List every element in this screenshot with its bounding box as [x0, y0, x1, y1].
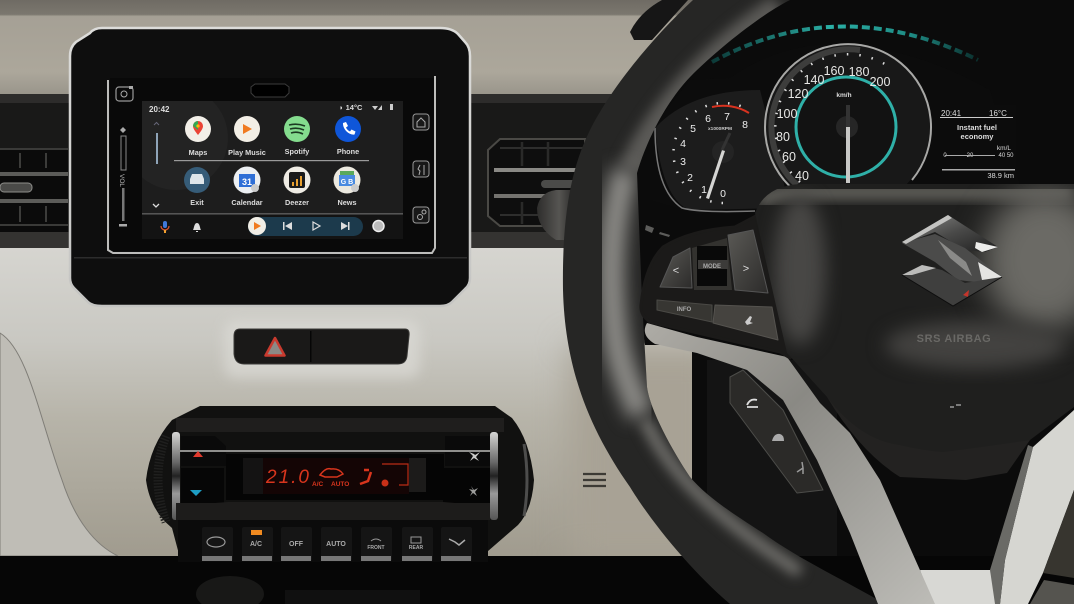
clock: 20:41: [941, 109, 962, 118]
hub top band: [758, 192, 1074, 202]
rim side highlight: [611, 170, 642, 415]
inner shaded band: [771, 49, 860, 185]
rim upper sheen: [632, 8, 780, 170]
scroll arrow up: [154, 122, 159, 125]
volume slider: VOL: [118, 174, 125, 187]
rim lower highlight: [645, 420, 800, 572]
temperature up arrow: [193, 451, 203, 457]
left lower spoke: [645, 323, 935, 604]
rpm labels: 2: [687, 172, 693, 184]
button: recirculate: [202, 527, 233, 561]
app icon: News: [334, 166, 360, 194]
wallpaper swirl: [124, 86, 228, 190]
voice button icon: [772, 434, 784, 441]
status indicators: ◗ 14°C: [339, 103, 363, 112]
temperature reading: 21.0: [265, 467, 311, 488]
Suzuki logo: [902, 215, 1002, 306]
centre air vent: [488, 139, 585, 226]
dock bar: [142, 215, 403, 239]
rpm labels: 7: [724, 111, 730, 123]
display side block left: [243, 458, 263, 494]
label: Phone: Phone: [337, 147, 359, 156]
app icon: Calendar: 31: [242, 177, 252, 187]
dock divider: [142, 213, 403, 214]
footwell panel: [707, 360, 837, 556]
speed labels: 40: [795, 169, 809, 183]
app icon: Phone: [335, 116, 361, 142]
call button icon: [747, 400, 758, 407]
right spoke bright face: [1000, 410, 1074, 604]
fuel economy title line two: economy: [961, 132, 994, 141]
dashboard speaker grille: [583, 474, 606, 486]
hub lower crescent: [885, 321, 1065, 369]
play: [313, 222, 320, 230]
display screen: [263, 458, 409, 494]
left lower trim curve: [0, 333, 118, 556]
scale mark 40 and 50: 40 50: [998, 153, 1014, 159]
display side block right: [409, 458, 426, 492]
app icon: Spotify: [284, 116, 310, 142]
previous track: [283, 222, 292, 230]
speed labels: 180: [849, 65, 869, 79]
button: next: >: [743, 263, 749, 275]
teal ambient strip: [712, 26, 978, 62]
AUTO indicator: AUTO: [331, 481, 349, 488]
needle: [706, 150, 725, 199]
instrument cluster: [650, 26, 1020, 215]
fan icon lower: [469, 486, 478, 496]
info display: [940, 105, 1016, 181]
tick scale: [775, 54, 888, 182]
rpm labels: 1: [701, 184, 707, 196]
steering wheel: [540, 0, 1074, 604]
tach face: [655, 90, 790, 210]
pad housing: [641, 216, 790, 358]
next track: [341, 222, 350, 230]
left chrome strip: [172, 432, 180, 520]
inner frame: [110, 78, 434, 251]
rpm labels: [680, 111, 748, 200]
display window: [226, 454, 444, 500]
scale mark 20: 20: [967, 153, 974, 159]
economy unit: km/L: [997, 145, 1011, 152]
app icon: Exit: [184, 167, 210, 193]
mode rocker: [692, 238, 732, 290]
speed labels: 120: [788, 87, 808, 101]
band textured top edge: [0, 94, 640, 103]
button row: [178, 520, 488, 562]
button: REAR: REAR: [409, 545, 423, 551]
lower console bevel: [176, 502, 490, 520]
lower right stalk: [1030, 580, 1074, 604]
app icon: News: G B: [341, 179, 353, 186]
app icon: Deezer: [284, 166, 310, 194]
left air vent: [0, 148, 68, 232]
app icon: Calendar: [234, 166, 260, 194]
stalk control icons: [645, 225, 670, 237]
wheel rim: [562, 0, 878, 604]
button: A/C: [242, 527, 273, 561]
scroll arrow down: [153, 204, 159, 207]
rpm labels: 5: [690, 123, 696, 135]
dark area behind the wheel: [620, 0, 1074, 556]
left rocker lower: [181, 468, 224, 516]
button: previous: <: [673, 265, 679, 277]
fuel economy title: Instant fuel: [957, 123, 997, 132]
button: REAR: [402, 527, 433, 561]
tick scale: [673, 103, 749, 203]
glass lower seam: [74, 257, 467, 258]
button: next: [728, 230, 768, 293]
hazard button: [234, 329, 409, 364]
speed labels: [776, 64, 890, 183]
label: Play Music: Play Music: [228, 148, 266, 157]
console outer: [146, 406, 534, 558]
scroll bar: [156, 133, 158, 164]
bell icon: [193, 223, 201, 232]
top bezel slot: [251, 84, 289, 97]
cluster rim line: [655, 128, 755, 212]
indicator stalk: [537, 190, 574, 240]
airflow icon: [360, 470, 371, 484]
centre hub: [836, 116, 858, 138]
volume slider: [118, 127, 127, 226]
left rocker upper: [181, 436, 226, 466]
speed labels: 100: [777, 107, 797, 121]
rpm labels: 0: [720, 188, 726, 200]
side button: phone: [413, 161, 429, 177]
label: Deezer: Deezer: [285, 198, 309, 207]
airbag hub: [750, 180, 1074, 460]
label: Spotify: Spotify: [285, 147, 310, 156]
button: INFO: INFO: [677, 307, 691, 313]
button: OFF: OFF: [289, 541, 304, 548]
button: INFO: [657, 300, 712, 322]
hub: [712, 141, 734, 163]
upper dashboard surface: [0, 0, 700, 96]
right dial edge: [524, 444, 527, 516]
home circle: [373, 220, 384, 232]
outer silver ring: [765, 44, 931, 191]
button: OFF: [281, 527, 312, 561]
speed labels: 200: [870, 75, 890, 89]
label: Maps: Maps: [189, 148, 207, 157]
speed labels: 160: [824, 64, 844, 78]
switch pad: left controls: [641, 216, 790, 358]
rpm labels: 3: [680, 156, 686, 168]
chrome frame edges: [108, 76, 435, 253]
right spoke shaded side: [990, 445, 1033, 604]
rpm unit: x1000RPM: [708, 126, 732, 132]
app divider: [174, 160, 369, 161]
hazard triangle: [266, 338, 284, 356]
trip distance: 38.9 km: [987, 171, 1014, 180]
microphone icon: [161, 221, 169, 233]
right rocker lower: [443, 468, 490, 516]
app icon: Play Music: [234, 116, 260, 142]
teal ring: [796, 77, 896, 177]
button: AUTO: AUTO: [326, 541, 346, 548]
car icon on display: [320, 469, 343, 477]
button: voice: [713, 305, 778, 340]
lower dashboard panel: [0, 248, 700, 558]
A/C indicator: A/C: [312, 481, 324, 488]
media pill: [248, 217, 363, 236]
button: previous: [660, 248, 692, 288]
redline arc: [712, 106, 749, 113]
end button icon: [797, 462, 803, 474]
camera icon button: [116, 86, 133, 101]
button: AUTO: [321, 527, 352, 561]
temperature: 16°C: [989, 109, 1007, 118]
gear knob area: [196, 576, 420, 604]
wiper stalk: [630, 0, 688, 40]
media app button: [248, 217, 266, 235]
button: FRONT: FRONT: [367, 545, 385, 551]
infotainment unit: [70, 28, 470, 306]
rpm labels: 8: [742, 119, 748, 131]
economy scale: 0: [943, 153, 947, 159]
right rocker upper: [445, 436, 490, 466]
label: Exit: Exit: [190, 198, 204, 207]
hub upper right glow: [983, 190, 1074, 330]
label: News: News: [337, 198, 357, 207]
button: A/C: A/C: [250, 541, 262, 548]
temperature down arrow: [190, 490, 202, 496]
floor shadow: [0, 556, 1074, 604]
label: Calendar: Calendar: [231, 198, 263, 207]
tachometer: [673, 103, 749, 203]
left dial knurl: [158, 436, 166, 522]
side button: home: [413, 114, 429, 130]
rpm labels: 6: [705, 113, 711, 125]
button: air mode: [441, 527, 472, 561]
cluster hood: [650, 45, 1020, 215]
bottom spoke junction: [920, 570, 995, 604]
side button: settings: [413, 207, 429, 223]
switch pad: lower controls: [730, 370, 823, 493]
band lower lip: [0, 232, 640, 248]
hazard button surround: [224, 320, 420, 378]
Android Auto screen: [142, 101, 403, 239]
needle: [846, 105, 850, 127]
speed labels: 140: [804, 73, 824, 87]
fan icon upper: [469, 451, 480, 461]
airbag hub skirt: [827, 397, 1030, 480]
fan level icon: [382, 480, 388, 486]
app icon: Maps: [185, 116, 211, 142]
SRS airbag marking: SRS AIRBAG: [917, 333, 991, 345]
console upper panel: [176, 418, 504, 432]
top chrome line: [178, 450, 490, 452]
unit label: km/h: [836, 92, 852, 99]
rpm labels: 4: [680, 138, 686, 150]
bezel frame: [70, 28, 470, 306]
right chrome strip: [490, 432, 498, 520]
hub left shading: [774, 195, 826, 345]
speed labels: 80: [776, 130, 790, 144]
signal icons: [372, 104, 393, 110]
status time: 20:42: [149, 105, 170, 114]
speed labels: 60: [782, 150, 796, 164]
level bracket: [382, 464, 408, 485]
climate control console: [146, 406, 534, 562]
button: FRONT: [361, 527, 392, 561]
warm tone right of the console: [570, 345, 720, 560]
mode rocker: MODE: [703, 264, 721, 270]
dark dashboard band: [0, 94, 640, 248]
speedometer: [765, 44, 931, 209]
hub seam marks: [950, 405, 961, 407]
right lower dark trim: [1043, 490, 1074, 578]
